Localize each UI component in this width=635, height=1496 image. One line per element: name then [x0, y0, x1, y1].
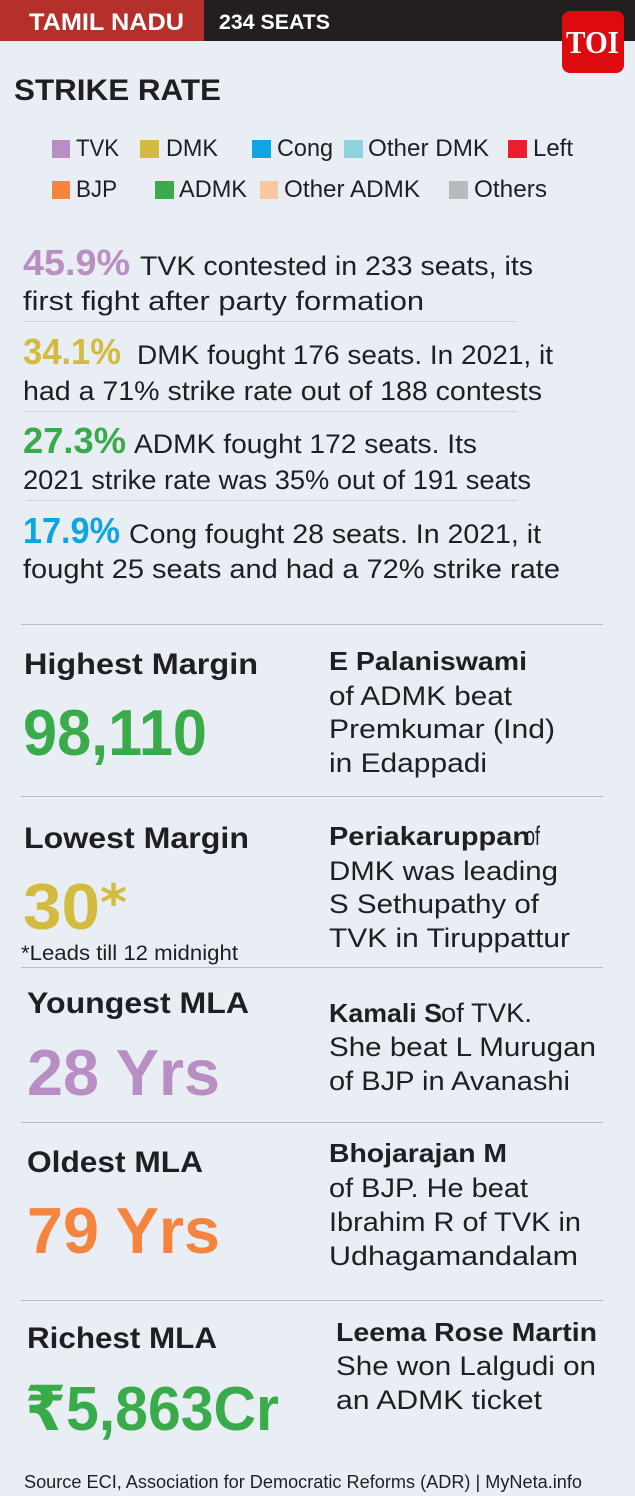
panel: richest MLA: She won Lalgudi on: [336, 1351, 596, 1381]
panel: highest margin: 98,110: [23, 696, 207, 769]
strike rate: TVK: [23, 242, 533, 316]
legend: Cong: [277, 135, 333, 162]
panel: highest margin: of ADMK beat: [329, 681, 513, 711]
legend: Other DMK: [368, 135, 489, 162]
panel: youngest MLA: Kamali S: [329, 998, 442, 1028]
panel: highest margin: in Edappadi: [329, 748, 487, 778]
legend: DMK: [166, 135, 218, 162]
panel: richest MLA: [25, 1317, 597, 1444]
panel: richest MLA: Leema Rose Martin: [336, 1317, 597, 1347]
panel: youngest MLA: of BJP in Avanashi: [329, 1066, 570, 1096]
header bar: 234 SEATS: [219, 11, 330, 34]
panel: lowest margin: DMK was leading: [329, 856, 558, 886]
panel: lowest margin: *Leads till 12 midnight: [21, 942, 238, 965]
panel: highest margin: Highest Margin: [24, 648, 258, 681]
strike rate: TVK: 45.9%: [23, 242, 130, 283]
legend: ADMK: [179, 176, 247, 203]
panel: richest MLA: ₹5,863Cr: [25, 1375, 279, 1444]
panel: youngest MLA: She beat L Murugan: [329, 1032, 596, 1062]
strike rate: DMK: had a 71% strike rate out of 188 contests: [23, 376, 542, 406]
panel: oldest MLA: Bhojarajan M: [329, 1138, 507, 1168]
strike rate: TVK: TVK contested in 233 seats, its: [140, 251, 533, 281]
panel: lowest margin: of: [525, 821, 540, 851]
strike rate: DMK: 34.1%: [23, 331, 121, 372]
panel: lowest margin: 30: [23, 870, 100, 943]
panel: oldest MLA: 79 Yrs: [27, 1194, 220, 1267]
panel: lowest margin: [21, 821, 570, 965]
header bar: [0, 0, 635, 41]
panel: highest margin: Premkumar (Ind): [329, 714, 555, 744]
strike rate: Congress: 17.9%: [23, 510, 120, 551]
panel: youngest MLA: 28 Yrs: [27, 1036, 220, 1109]
strike rate: ADMK: 2021 strike rate was 35% out of 191 seats: [23, 465, 531, 495]
legend: BJP: [76, 176, 117, 203]
legend: [52, 135, 573, 203]
panel: lowest margin: TVK in Tiruppattur: [329, 923, 570, 953]
strike rate: DMK: DMK fought 176 seats. In 2021, it: [137, 340, 554, 370]
panel: oldest MLA: [27, 1138, 581, 1271]
panel: highest margin: E Palaniswami: [329, 646, 527, 676]
panel: oldest MLA: Oldest MLA: [27, 1146, 203, 1179]
panel: oldest MLA: of BJP. He beat: [329, 1173, 529, 1203]
strike rate: Congress: fought 25 seats and had a 72% strike rate: [23, 554, 560, 584]
panel: youngest MLA: [27, 987, 596, 1109]
legend: Other ADMK: [284, 176, 420, 203]
legend: Others: [474, 176, 547, 203]
panel: lowest margin: Periakaruppan: [329, 821, 530, 851]
strike rate: TVK: first fight after party formation: [23, 286, 424, 316]
strike rate: Congress: [23, 510, 560, 584]
icon: TOI logo: [562, 11, 624, 73]
panel: youngest MLA: of TVK.: [441, 998, 532, 1028]
source note: Source ECI, Association for Democratic Reforms (ADR) | MyNeta.info: [24, 1472, 582, 1492]
panel: richest MLA: an ADMK ticket: [336, 1385, 543, 1415]
heading: strike rate: STRIKE RATE: [14, 74, 221, 107]
strike rate: DMK: [23, 331, 554, 406]
icon: TOI logo: TOI: [566, 24, 619, 60]
panel: richest MLA: Richest MLA: [27, 1322, 217, 1355]
legend: TVK: [76, 135, 119, 162]
panel: lowest margin: S Sethupathy of: [329, 889, 540, 919]
legend: Left: [533, 135, 573, 162]
panel: oldest MLA: Udhagamandalam: [329, 1241, 578, 1271]
strike rate: ADMK: 27.3%: [23, 420, 126, 461]
panel: highest margin: [23, 646, 555, 778]
strike rate: ADMK: ADMK fought 172 seats. Its: [134, 429, 477, 459]
panel: youngest MLA: Youngest MLA: [27, 987, 249, 1020]
strike rate: Congress: Cong fought 28 seats. In 2021, it: [129, 519, 542, 549]
panel: lowest margin: *: [100, 874, 127, 932]
header bar: TAMIL NADU: [29, 9, 184, 36]
panel: oldest MLA: Ibrahim R of TVK in: [329, 1207, 581, 1237]
strike rate: ADMK: [23, 420, 531, 495]
panel: lowest margin: Lowest Margin: [24, 822, 249, 855]
